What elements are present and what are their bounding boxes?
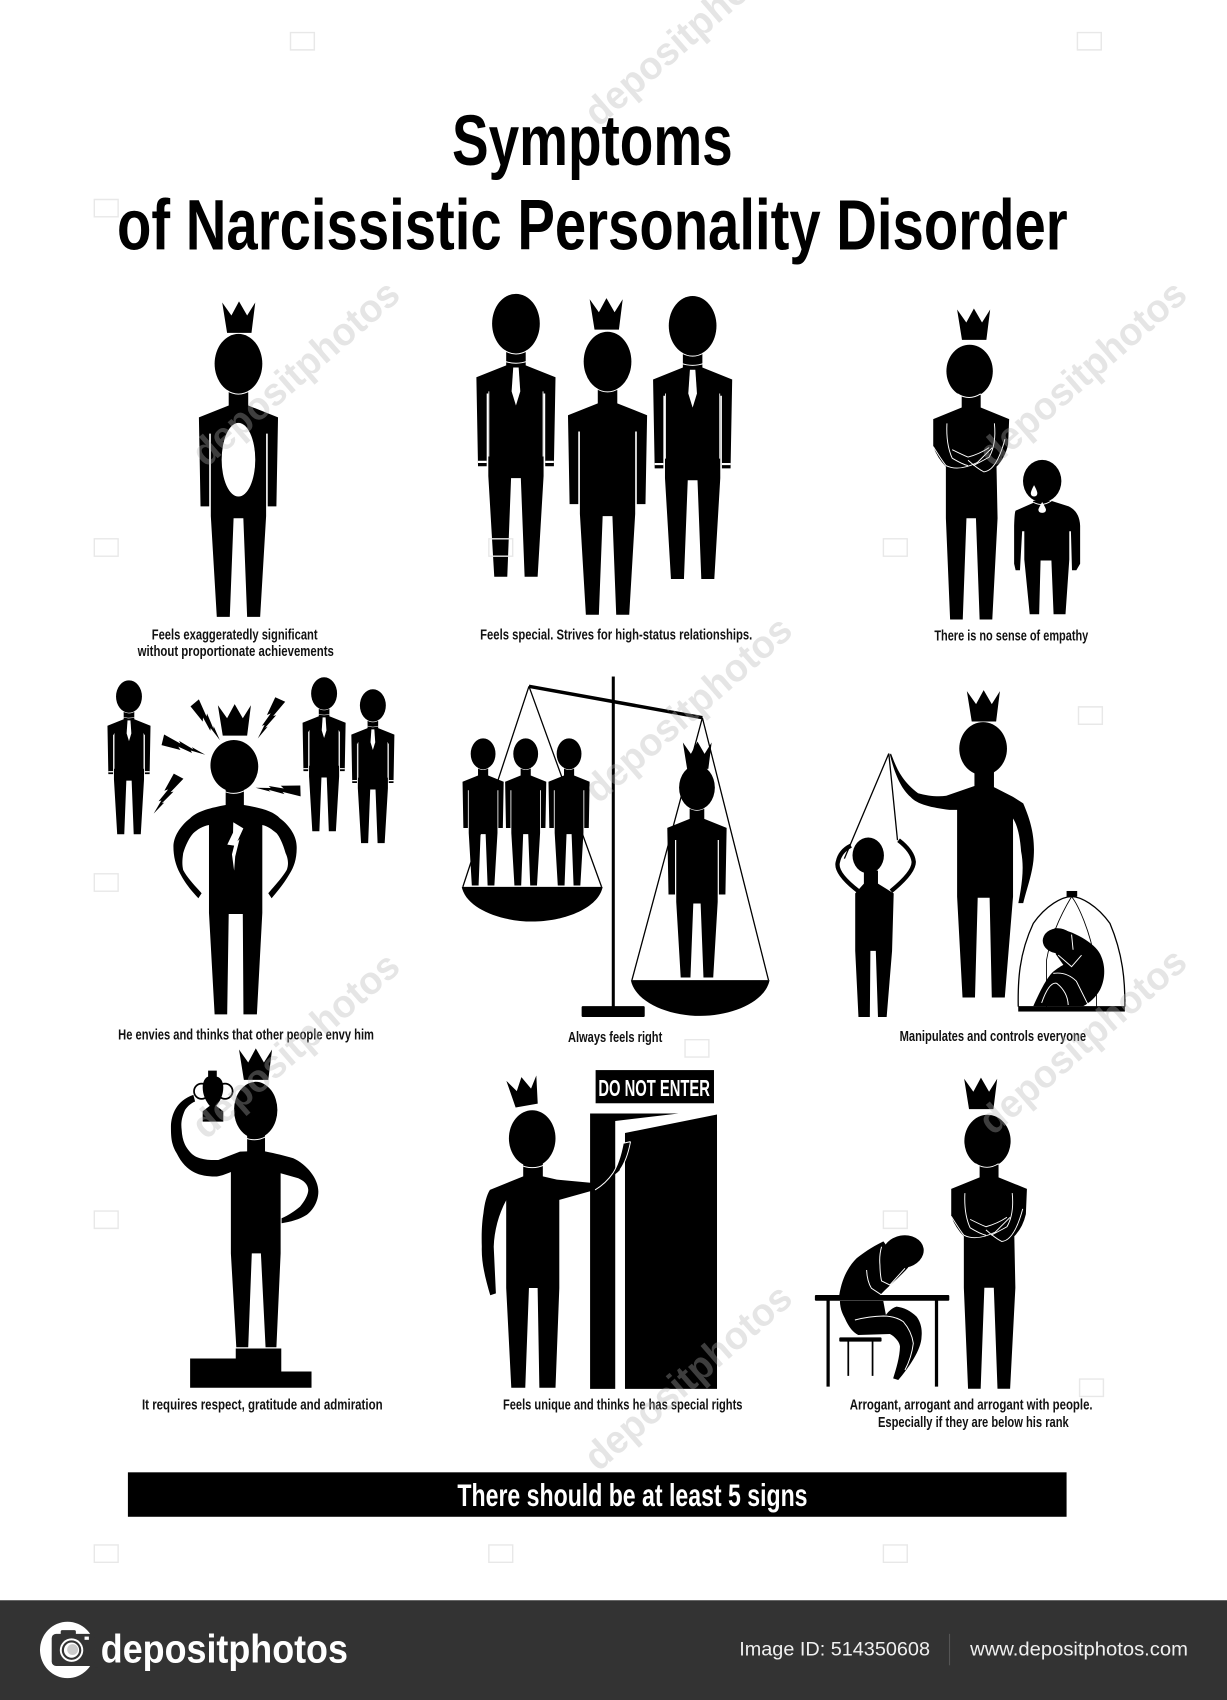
watermarks: depositphotos	[971, 940, 1195, 1143]
caption: arrogant: Especially if they are below his rank	[878, 1415, 1069, 1431]
watermarks: depositphotos	[971, 272, 1195, 475]
figure: man with trophy on podium	[171, 1048, 318, 1388]
watermarks: depositphotos	[184, 272, 408, 475]
watermarks: depositphotos	[184, 944, 408, 1147]
door	[590, 1113, 717, 1389]
caption: arrogant	[850, 1397, 1093, 1431]
figure: no empathy, crowned man and crying child	[933, 308, 1080, 620]
sign: do not enter: DO NOT ENTER	[598, 1075, 710, 1101]
caption: manipulates: Manipulates and controls everyone	[900, 1029, 1086, 1045]
title: Symptoms	[452, 101, 733, 181]
caption: arrogant: Arrogant, arrogant and arrogant with people.	[850, 1397, 1093, 1413]
icon: depositphotos camera logo	[40, 1622, 98, 1678]
logo wordmark: depositphotos	[101, 1628, 348, 1672]
banner: at least 5 signs: There should be at least 5 signs	[457, 1478, 808, 1513]
banner: at least 5 signs	[128, 1472, 1067, 1517]
icon: trophy	[194, 1071, 233, 1122]
image id: Image ID: 514350608	[739, 1639, 930, 1661]
caption: significance: Feels exaggeratedly significant	[152, 628, 318, 644]
caption: unique: Feels unique and thinks he has special rights	[503, 1397, 742, 1413]
cage	[1018, 891, 1125, 1012]
figure: envy, man with lightning bolts	[107, 677, 394, 1014]
title	[117, 101, 1068, 265]
footer bar	[0, 1600, 1227, 1700]
figure: arrogant man over seated person at table	[815, 1078, 1027, 1389]
sign: do not enter	[596, 1070, 714, 1103]
website: www.depositphotos.com	[969, 1639, 1188, 1661]
caption: empathy: There is no sense of empathy	[934, 629, 1089, 645]
caption: always right: Always feels right	[568, 1030, 662, 1046]
caption: admiration: It requires respect, gratitude and admiration	[142, 1397, 383, 1413]
figure: crowned man among suited men	[476, 294, 732, 615]
caption: significance: without proportionate achievements	[137, 644, 334, 660]
figure: balance scale, crowned man outweighs three men	[462, 677, 770, 1017]
figure: puppeteer, caged person and controlled child	[837, 690, 1125, 1017]
watermarks: depositphotos	[576, 608, 801, 811]
figure: man with empty chest	[199, 301, 278, 617]
caption: special: Feels special. Strives for high-status relationships.	[480, 628, 752, 644]
caption: significance	[137, 628, 334, 660]
watermarks: depositphotos	[576, 1276, 801, 1479]
icon: podium	[190, 1349, 312, 1388]
figure: man at door with sign	[482, 1070, 717, 1389]
caption: envy: He envies and thinks that other people envy him	[118, 1028, 374, 1044]
